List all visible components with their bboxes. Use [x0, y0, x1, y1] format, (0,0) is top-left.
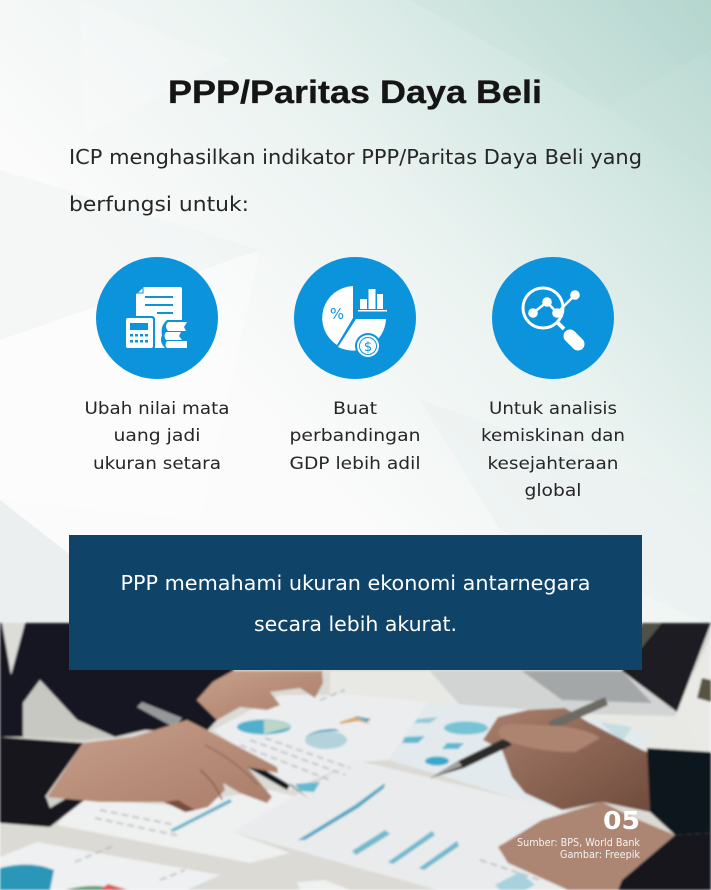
caption	[481, 399, 625, 501]
photo: business team reviewing charts	[0, 623, 711, 890]
background panel with geometric facets	[0, 0, 711, 625]
caption	[290, 399, 420, 474]
caption: perbandingan	[290, 426, 420, 446]
caption: global	[524, 481, 582, 501]
page number: 05	[603, 806, 640, 835]
intro text: ICP menghasilkan indikator PPP/Paritas Daya Beli yang	[69, 145, 642, 169]
icon: magnifier with line graph	[492, 257, 614, 379]
item: perbandingan GDP	[290, 257, 420, 474]
laptop	[430, 623, 711, 760]
caption: Buat	[333, 399, 377, 419]
callout box: secara lebih akurat.	[254, 612, 457, 636]
source credit: Sumber: BPS, World Bank	[517, 837, 641, 849]
source credit	[517, 837, 641, 861]
left upper hand	[197, 671, 323, 720]
intro text: berfungsi untuk:	[69, 192, 249, 216]
icon: pie chart, bars and coin: %	[330, 305, 344, 323]
icon: pie chart, bars and coin: $	[364, 340, 372, 355]
right pen	[430, 697, 608, 778]
caption: ukuran setara	[93, 454, 221, 474]
right sleeve	[647, 748, 711, 835]
caption: GDP lebih adil	[290, 454, 420, 474]
left suit and sleeves	[0, 623, 260, 827]
caption: Ubah nilai mata	[84, 399, 230, 419]
lower right sleeve	[618, 833, 711, 890]
book at the right edge	[697, 678, 711, 702]
right hand index finger	[498, 724, 600, 752]
right hand	[483, 708, 650, 812]
caption: kesejahteraan	[488, 454, 618, 474]
item: ubah nilai mata uang	[84, 257, 230, 474]
printed text rows on sheets	[75, 690, 545, 880]
item: analisis kemiskinan	[481, 257, 625, 501]
source credit: Gambar: Freepik	[560, 849, 641, 861]
lower right hand	[498, 802, 675, 890]
left pen	[137, 702, 309, 799]
intro text	[69, 145, 642, 216]
callout box: PPP memahami ukuran ekonomi antarnegara	[120, 571, 590, 595]
icon: pie chart, bars and coin	[294, 257, 416, 379]
title: PPP/Paritas Daya Beli	[168, 74, 542, 110]
callout box	[69, 535, 642, 670]
icon: document, calculator and coins	[96, 257, 218, 379]
left hand	[47, 720, 278, 812]
caption	[84, 399, 230, 474]
sheets on the table	[0, 695, 653, 890]
charts on sheets	[0, 716, 632, 890]
caption: uang jadi	[114, 426, 200, 446]
caption: kemiskinan dan	[481, 426, 625, 446]
caption: Untuk analisis	[489, 399, 617, 419]
